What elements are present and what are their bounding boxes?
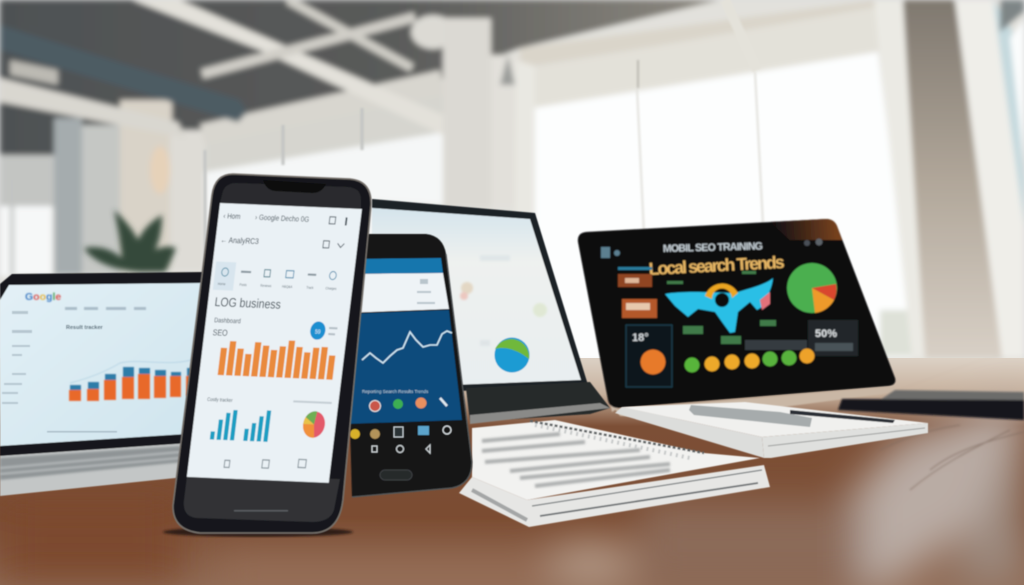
phone screen	[187, 203, 362, 483]
screen heading small: MOBIL SEO TRAINING	[663, 240, 763, 255]
orange bar chart	[218, 338, 337, 380]
left info cards	[618, 267, 657, 318]
chart labels: Reporting Search Results Trends	[362, 389, 429, 394]
right column	[903, 0, 1002, 358]
column left	[54, 118, 82, 275]
phone body	[345, 234, 472, 497]
tablet	[578, 219, 896, 418]
notch	[263, 180, 326, 193]
ceiling	[0, 0, 720, 165]
tablet stand edge	[598, 345, 618, 412]
navigation tabs: Track	[306, 285, 314, 290]
notebook edge	[762, 423, 928, 458]
dashboard labels: SEO	[212, 328, 228, 338]
notebook side	[459, 465, 770, 527]
table surface	[0, 358, 1024, 585]
ceiling duct left	[10, 60, 58, 85]
back laptop	[372, 199, 610, 424]
score badge: 59	[314, 329, 321, 336]
top blue bar	[345, 258, 443, 274]
ceiling lamp	[411, 15, 455, 49]
lid bezel	[0, 272, 205, 456]
navigation tabs: Posts	[239, 283, 247, 287]
tablet top-right glow	[770, 219, 842, 240]
navigation tabs: Charges	[325, 286, 337, 291]
laptop footer	[47, 431, 117, 432]
pie chart	[787, 263, 837, 313]
dark steel beam	[0, 25, 247, 122]
mullions	[205, 0, 770, 360]
wood highlights	[0, 395, 1024, 585]
laptop stacked bar chart	[69, 358, 198, 401]
bottom app icons	[350, 426, 451, 439]
centre windows	[205, 132, 447, 275]
google logo: Google	[25, 291, 61, 303]
stat card with orange dial	[626, 325, 672, 387]
dark pen	[790, 410, 895, 423]
window frame	[514, 60, 535, 358]
map smudges	[460, 255, 547, 346]
keyboard base	[0, 438, 195, 496]
shadow	[163, 527, 353, 537]
laptop sidebar	[2, 311, 32, 404]
ceiling beam left	[0, 78, 186, 138]
phone body	[173, 174, 371, 533]
teal bar charts	[210, 408, 271, 442]
right ceiling beam	[520, 0, 875, 66]
navigation tabs: Reviews	[260, 283, 272, 288]
screen heading: Local search Trends	[648, 252, 785, 279]
map pie	[494, 338, 530, 372]
map screen	[372, 208, 581, 388]
small pie chart	[302, 411, 326, 438]
lower chart label: Costly tracker	[207, 396, 233, 403]
keyboard keys	[0, 446, 184, 480]
navigation tabs: Home	[218, 282, 226, 286]
stylus pen	[689, 405, 812, 427]
bottom nav icons	[224, 456, 306, 471]
navigation tabs	[213, 262, 340, 295]
status dots	[684, 348, 814, 372]
pie title	[293, 400, 332, 404]
dashboard labels: Dashboard	[214, 318, 241, 325]
centre window band upper	[205, 95, 445, 172]
far right blue frame	[993, 0, 1024, 225]
button strip	[745, 340, 807, 350]
panel labels	[417, 279, 435, 304]
nav buttons	[372, 445, 430, 453]
header row: ‹ Hom	[223, 213, 241, 221]
laptop screen	[0, 283, 202, 446]
home button	[380, 470, 412, 480]
top icons	[601, 238, 822, 258]
cover lines	[532, 470, 762, 506]
laptop tabs	[65, 307, 146, 310]
right wall strip	[955, 0, 1024, 358]
base highlight	[470, 403, 610, 424]
tablet on the right of table	[838, 390, 1024, 420]
left laptop	[0, 272, 205, 496]
second phone	[345, 234, 472, 497]
wood grain	[880, 425, 1024, 490]
laptop lid	[372, 199, 588, 395]
dark blue chart panel	[345, 310, 462, 424]
dashboard labels	[212, 318, 241, 339]
warm column	[120, 100, 172, 270]
plant	[84, 210, 176, 272]
stat card with orange dial: 18°	[632, 332, 649, 344]
distant trees	[880, 310, 916, 356]
header row	[223, 212, 347, 226]
far right window	[1010, 20, 1024, 165]
right windows	[533, 52, 916, 362]
USA map	[665, 278, 773, 333]
left fold panel	[615, 407, 764, 458]
notebook top page	[472, 420, 760, 500]
right page	[622, 402, 928, 437]
header row: › Google Decho 0G	[255, 214, 310, 224]
right rim	[352, 254, 472, 497]
front phone	[163, 174, 371, 537]
bezel top	[220, 183, 361, 209]
app icons	[370, 398, 447, 412]
sub header row: ← AnalyRC3	[220, 235, 259, 246]
laptop chart title: Result tracker	[66, 325, 104, 331]
far left window	[0, 206, 52, 276]
spiral binding	[530, 421, 704, 453]
score badge	[309, 321, 338, 340]
left wall below ceiling	[0, 155, 60, 207]
sub header row	[220, 235, 345, 250]
right frame	[874, 0, 930, 358]
upper window band right	[533, 7, 878, 108]
home bar	[234, 510, 288, 512]
white panel	[345, 273, 449, 313]
percent card	[808, 320, 858, 356]
background: office interior	[0, 0, 1024, 420]
front spiral notebook	[459, 420, 770, 527]
white ceiling beam	[132, 0, 466, 138]
back open notebook	[615, 402, 928, 458]
bezel bottom	[184, 476, 340, 522]
percent card: 50%	[815, 328, 837, 340]
secondary ceiling beams	[288, 0, 412, 68]
business heading: LOG business	[214, 295, 282, 312]
printed lines	[482, 434, 670, 486]
location pin	[705, 284, 738, 299]
map labels	[667, 271, 776, 344]
ceiling band centre	[200, 70, 445, 145]
tablet body	[578, 219, 895, 408]
pillar centre	[443, 18, 491, 208]
navigation tabs: H&Q&A	[282, 284, 293, 289]
line chart	[362, 331, 452, 363]
laptop base	[466, 382, 610, 422]
